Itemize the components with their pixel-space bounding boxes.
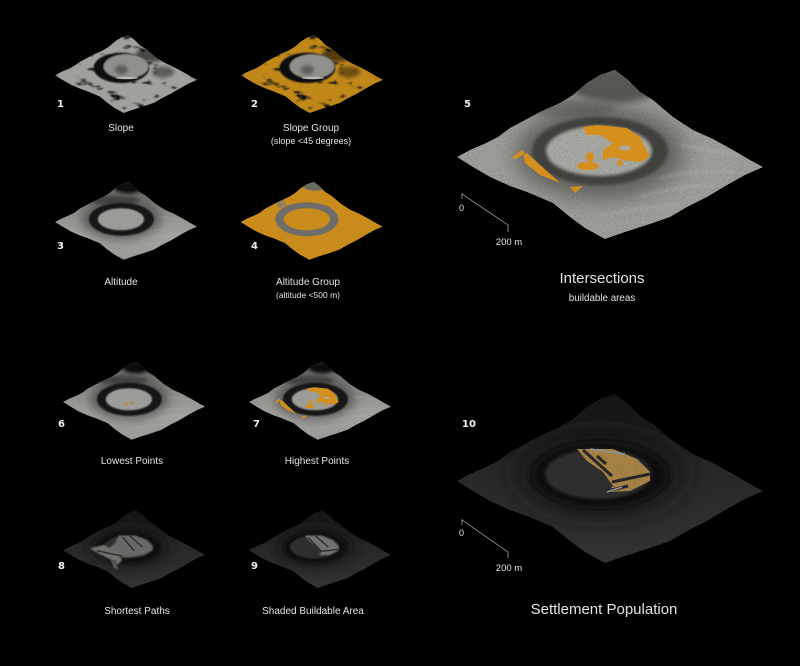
number 10: 10 xyxy=(462,419,476,430)
terrain: slope map xyxy=(55,35,197,113)
panel 4: altitude group xyxy=(241,179,383,300)
terrain: highest points xyxy=(249,362,391,440)
note: altitude threshold: (altitude <500 m) xyxy=(276,290,340,300)
number 2: 2 xyxy=(251,99,258,110)
heading: Intersections: Intersections xyxy=(559,270,645,287)
terrain: shaded buildable area xyxy=(249,510,391,588)
terrain: altitude group xyxy=(241,179,383,260)
number 3: 3 xyxy=(57,241,64,252)
terrain: intersections xyxy=(457,70,763,239)
panel 10: settlement population xyxy=(457,394,763,618)
label: Lowest Points: Lowest Points xyxy=(101,456,163,467)
panel 9: shaded buildable area xyxy=(249,510,391,617)
subheading: buildable areas: buildable areas xyxy=(569,293,635,304)
scale bar: 200 m xyxy=(496,237,522,248)
number 6: 6 xyxy=(58,419,65,430)
number 9: 9 xyxy=(251,561,258,572)
scale bar xyxy=(459,193,522,248)
scale bar: 200 m xyxy=(496,563,522,574)
heading: Settlement Population: Settlement Population xyxy=(531,601,677,618)
scale bar: 0 xyxy=(459,528,464,538)
terrain: lowest points xyxy=(63,362,205,440)
panel 8: shortest paths xyxy=(58,510,205,617)
number 4: 4 xyxy=(251,241,258,252)
label: Shortest Paths: Shortest Paths xyxy=(104,606,170,617)
number 8: 8 xyxy=(58,561,65,572)
label: Shaded Buildable Area: Shaded Buildable Area xyxy=(262,606,364,617)
panel 2: slope group xyxy=(238,31,386,146)
number 1: 1 xyxy=(57,99,64,110)
scale bar: 0 xyxy=(459,203,464,213)
panel 1: slope xyxy=(52,31,200,134)
label: Altitude Group: Altitude Group xyxy=(276,277,340,288)
scale bar xyxy=(459,519,522,574)
label: Slope: Slope xyxy=(108,123,134,134)
label: Altitude: Altitude xyxy=(104,277,138,288)
label: Highest Points: Highest Points xyxy=(285,456,349,467)
panel 5: intersections xyxy=(450,60,770,304)
terrain: altitude xyxy=(55,182,197,260)
terrain: settlement population xyxy=(457,394,763,563)
terrain: shortest paths xyxy=(63,510,205,588)
number 5: 5 xyxy=(464,99,471,110)
panel 3: altitude xyxy=(55,182,197,288)
panel 7: highest points xyxy=(249,362,391,467)
terrain: slope group xyxy=(241,35,383,113)
note: slope threshold: (slope <45 degrees) xyxy=(271,136,351,146)
number 7: 7 xyxy=(253,419,260,430)
panel 6: lowest points xyxy=(58,362,205,467)
label: Slope Group: Slope Group xyxy=(283,123,340,134)
